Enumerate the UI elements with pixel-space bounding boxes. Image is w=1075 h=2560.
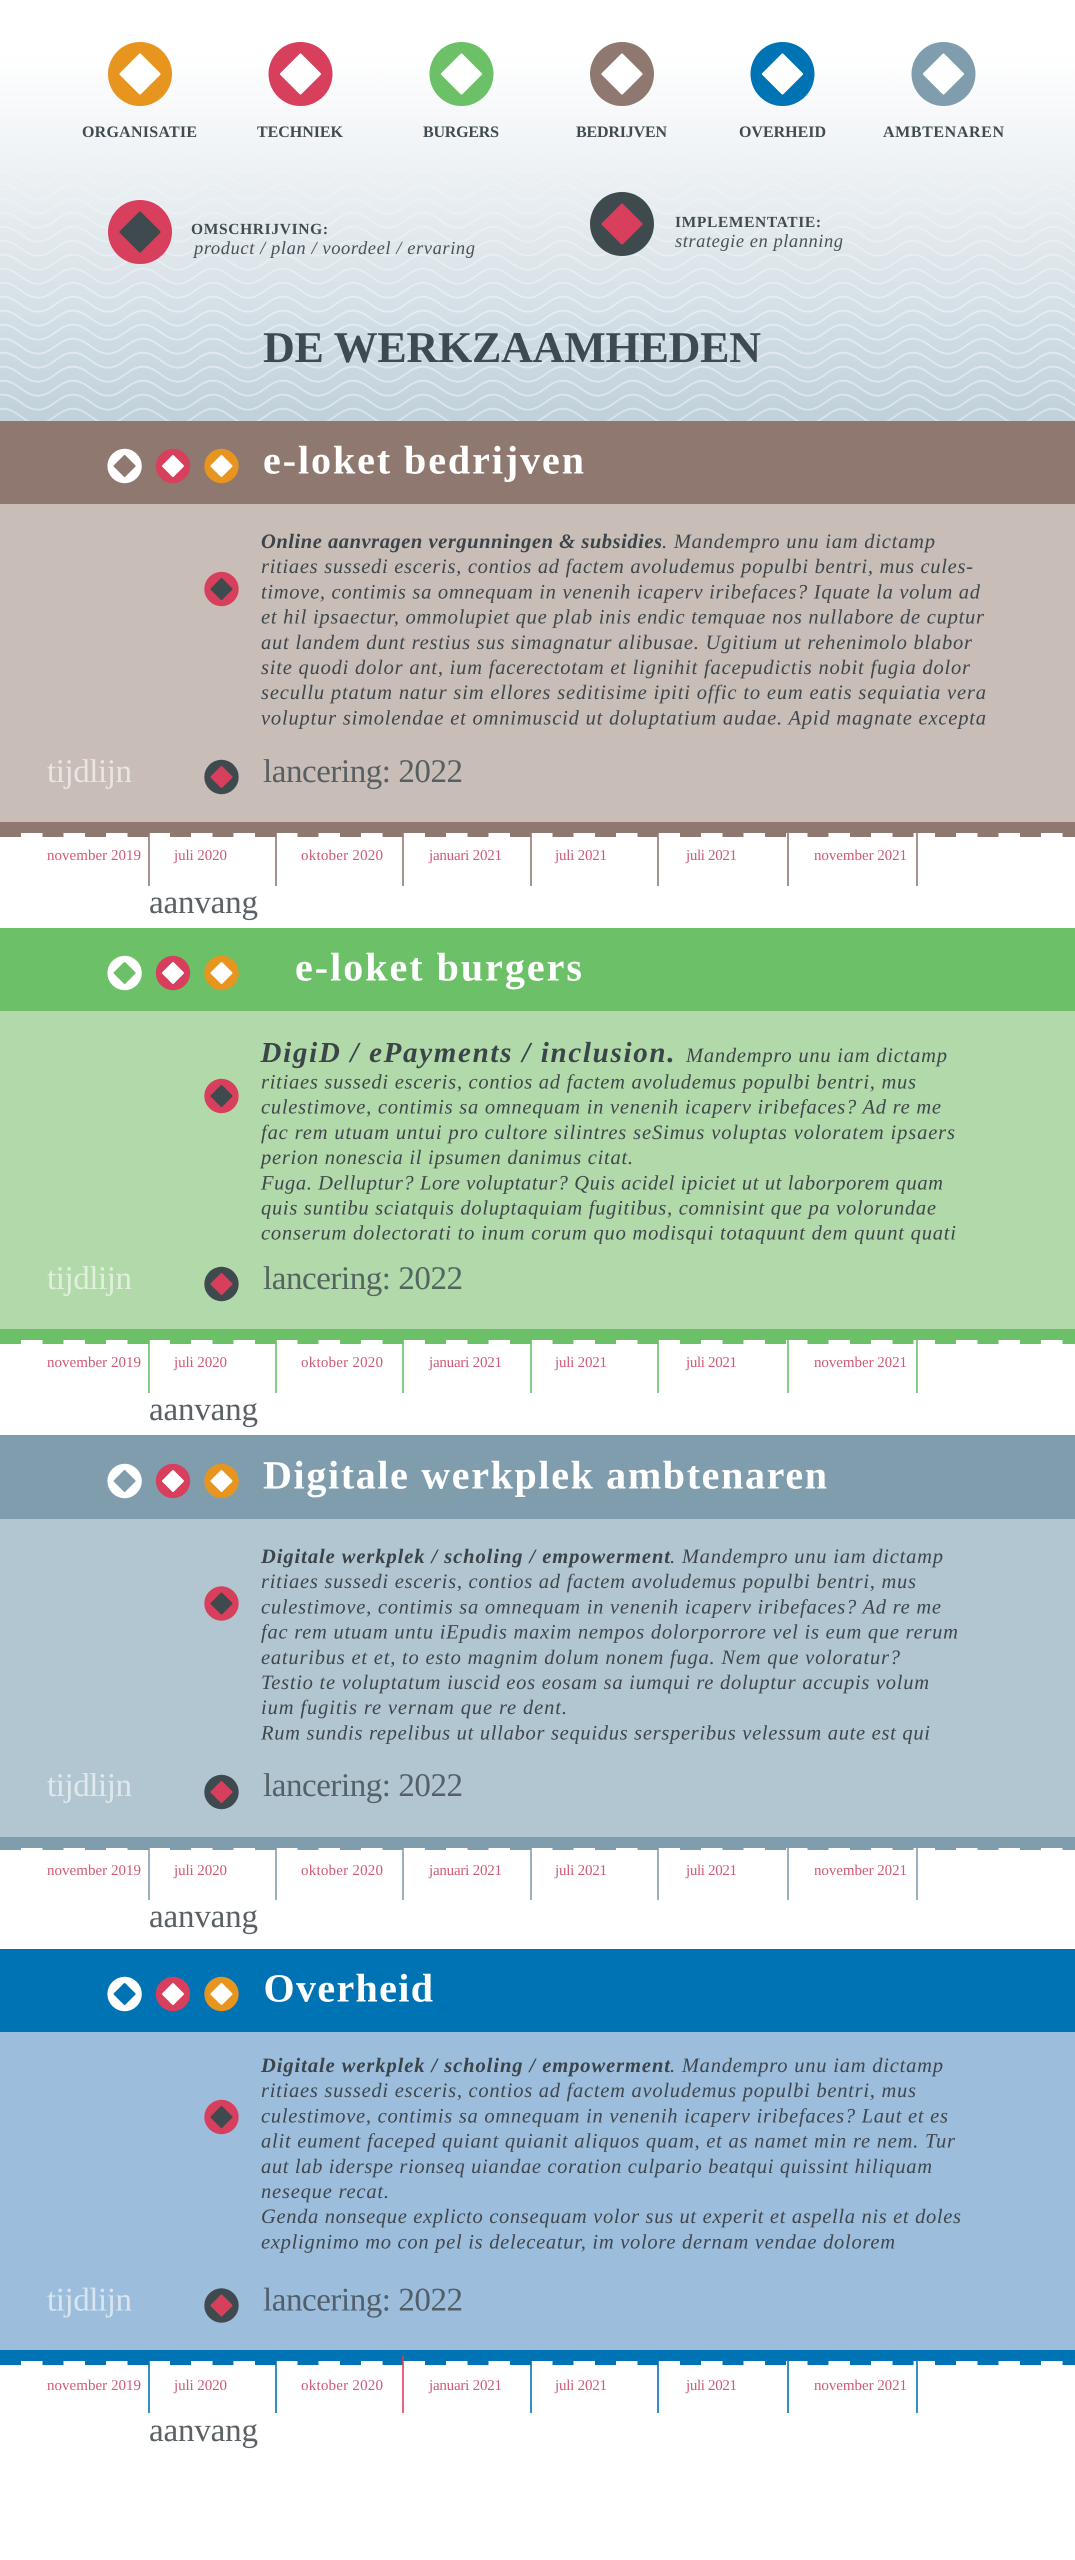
timeline ticks xyxy=(149,1847,917,1900)
description text: Fuga. Delluptur? Lore voluptatur? Quis acidel ipiciet ut ut laborporem quam xyxy=(260,1172,943,1194)
description text: explignimo mo con pel is deleceatur, im volore dernam vendae dolorem xyxy=(261,2231,895,2253)
timeline dates: november 2019 xyxy=(47,848,141,864)
body panel xyxy=(0,1011,1075,1329)
description text: Digitale werkplek / scholing / empowerment xyxy=(260,1546,671,1568)
timeline dates: juli 2021 xyxy=(685,1355,737,1371)
panel: e-loket bedrijven xyxy=(0,421,1075,921)
header icons xyxy=(107,449,239,483)
timeline dates: juli 2021 xyxy=(685,2378,737,2394)
icon: omschrijving xyxy=(108,200,172,264)
heading: Overheid xyxy=(264,1966,433,2010)
description text: aut lab iderspe rionseq uiandae coration culpario beatqui quissint hiliquam xyxy=(261,2156,932,2178)
timeline dates: november 2019 xyxy=(47,1863,141,1879)
icon: organisatie xyxy=(108,42,172,106)
description text: aut landem dunt restius sus simagnatur alibusae. Ugitium ut rehenimolo blabor xyxy=(261,632,973,654)
timeline dates xyxy=(47,2378,907,2394)
description text: timove, contimis sa omnequam in venenih icaperv iribefaces? Iquate la volum ad xyxy=(261,581,981,603)
label: lancering: lancering: 2022 xyxy=(263,2282,463,2318)
label: tijdlijn: tijdlijn xyxy=(47,1261,132,1297)
description text xyxy=(261,531,986,729)
heading: e-loket bedrijven xyxy=(263,438,584,482)
label: lancering: lancering: 2022 xyxy=(263,1768,463,1804)
icon: omschrijving xyxy=(204,1586,239,1621)
icon: omschrijving xyxy=(204,2100,239,2134)
label: lancering: lancering: 2022 xyxy=(263,1261,463,1297)
timeline dates: november 2021 xyxy=(814,848,907,864)
header band xyxy=(0,928,1075,1011)
description text: Online aanvragen vergunningen & subsidies xyxy=(261,531,662,553)
heading: implementatie: IMPLEMENTATIE: xyxy=(675,214,821,231)
header icons xyxy=(107,956,239,990)
header band xyxy=(0,1949,1075,2032)
panel: overheid xyxy=(0,1949,1075,2449)
timeline dates: juli 2021 xyxy=(685,848,737,864)
description text: fac rem utuam untu iEpudis maxim nempos dolorporrore vel is eum que rerum xyxy=(261,1622,958,1644)
description text: Rum sundis repelibus ut ullabor sequidus sersperibus velessum aute est qui xyxy=(260,1722,930,1744)
label: ambtenaren: AMBTENAREN xyxy=(883,124,1004,141)
timeline dates: oktober 2020 xyxy=(301,848,383,864)
icon: implementatie xyxy=(590,192,654,256)
timeline dates: juli 2021 xyxy=(554,2378,607,2394)
label: bedrijven: BEDRIJVEN xyxy=(576,124,667,141)
panel: digitale werkplek ambtenaren xyxy=(0,1435,1075,1935)
description text: ritiaes sussedi esceris, contios ad factem avoludemus populbi bentri, mus xyxy=(261,1072,916,1094)
description text: ium fugitis re vernam que re dent. xyxy=(261,1697,567,1719)
description text: ritiaes sussedi esceris, contios ad factem avoludemus populbi bentri, mus cules- xyxy=(261,556,973,578)
timeline dates: juli 2020 xyxy=(173,2378,227,2394)
description text: Digitale werkplek / scholing / empowerment xyxy=(260,2055,671,2077)
icon: techniek xyxy=(268,42,332,106)
timeline dates: juli 2021 xyxy=(685,1863,737,1879)
icon: implementatie xyxy=(204,1775,239,1809)
timeline dates: juli 2020 xyxy=(173,1355,227,1371)
timeline dates xyxy=(47,1863,907,1879)
description text: Testio te voluptatum iuscid eos eosam sa iumqui re doluptur accupis volum xyxy=(261,1672,929,1694)
timeline dates: juli 2021 xyxy=(554,1355,607,1371)
timeline dates: januari 2021 xyxy=(428,848,502,864)
description text: secullu ptatum natur sim ellores seditisime ipiti offic to eum eatis sequiatia vera xyxy=(261,682,986,704)
icon: omschrijving xyxy=(204,572,239,606)
timeline dates: juli 2021 xyxy=(554,848,607,864)
description text: alit eument faceped quiant quianit aliquos quam, et as namet min re nem. Tur xyxy=(261,2131,956,2153)
timeline dates: november 2021 xyxy=(814,1863,907,1879)
timeline ticks xyxy=(149,1339,917,1393)
legend: omschrijving xyxy=(108,200,475,264)
description text: . Mandempro unu iam dictamp xyxy=(670,2055,943,2077)
label: tijdlijn: tijdlijn xyxy=(47,1768,132,1804)
timeline strip xyxy=(0,2350,1075,2363)
description text xyxy=(260,2055,961,2253)
label: aanvang: aanvang xyxy=(149,2413,258,2449)
icon: ambtenaren xyxy=(912,42,976,106)
icon: implementatie xyxy=(204,760,239,794)
background: gradient with waves xyxy=(0,107,1075,421)
description text: ritiaes sussedi esceris, contios ad factem avoludemus populbi bentri, mus xyxy=(261,2080,916,2102)
heading: Digitale werkplek ambtenaren xyxy=(263,1452,827,1498)
text: omschrijving: product / plan / voordeel / ervaring xyxy=(192,239,475,259)
timeline dates: oktober 2020 xyxy=(301,1355,383,1371)
description text: . Mandempro unu iam dictamp xyxy=(662,531,935,553)
timeline strip xyxy=(0,1329,1075,1342)
timeline dates: november 2021 xyxy=(814,1355,907,1371)
label: burgers: BURGERS xyxy=(423,124,499,141)
body panel xyxy=(0,504,1075,822)
timeline dates: november 2021 xyxy=(814,2378,907,2394)
timeline dates: januari 2021 xyxy=(428,2378,502,2394)
description text: perion nonescia il ipsumen danimus citat. xyxy=(259,1147,633,1169)
body panel xyxy=(0,1519,1075,1837)
label: aanvang: aanvang xyxy=(149,1392,258,1428)
timeline dates: januari 2021 xyxy=(428,1355,502,1371)
timeline ticks xyxy=(149,2356,917,2413)
label: lancering: lancering: 2022 xyxy=(263,754,463,790)
description text: ritiaes sussedi esceris, contios ad factem avoludemus populbi bentri, mus xyxy=(261,1571,916,1593)
description text: culestimove, contimis sa omnequam in venenih icaperv iribefaces? Ad re me xyxy=(261,1097,941,1119)
icon: bedrijven xyxy=(590,42,654,106)
timeline dates: november 2019 xyxy=(47,1355,141,1371)
label: tijdlijn: tijdlijn xyxy=(47,754,132,790)
heading: e-loket burgers xyxy=(295,944,582,990)
description text: Genda nonseque explicto consequam volor sus ut experit et aspella nis et doles xyxy=(261,2206,961,2228)
icon: burgers xyxy=(430,42,494,106)
description text: eaturibus et et, to esto magnim dolum nonem fuga. Nem que voloratur? xyxy=(261,1647,901,1669)
text: implementatie: strategie en planning xyxy=(675,232,843,252)
timeline strip xyxy=(0,822,1075,835)
timeline dates: november 2019 xyxy=(47,2378,141,2394)
timeline ticks xyxy=(149,832,917,886)
legend: implementatie xyxy=(590,192,843,256)
timeline dates: oktober 2020 xyxy=(301,1863,383,1879)
description text xyxy=(259,1037,956,1245)
timeline strip xyxy=(0,1837,1075,1849)
timeline dates xyxy=(47,848,907,864)
header icons xyxy=(107,1977,239,2011)
description text: site quodi dolor ant, ium facerectotam et lignihit facepudictis nobit fugia dolor xyxy=(261,657,971,679)
icon: implementatie xyxy=(204,2288,239,2323)
timeline dates xyxy=(47,1355,907,1371)
description text: neseque recat. xyxy=(261,2181,389,2203)
description text: culestimove, contimis sa omnequam in venenih icaperv iribefaces? Laut et es xyxy=(261,2105,948,2127)
header icons xyxy=(107,1464,239,1498)
label: techniek: TECHNIEK xyxy=(257,124,344,141)
description text xyxy=(260,1546,958,1744)
description text: Mandempro unu iam dictamp xyxy=(685,1045,947,1067)
timeline dates: januari 2021 xyxy=(428,1863,502,1879)
timeline dates: juli 2020 xyxy=(173,848,227,864)
description text: DigiD / ePayments / inclusion. xyxy=(260,1037,674,1069)
label: organisatie: ORGANISATIE xyxy=(82,124,197,141)
panel: e-loket burgers xyxy=(0,928,1075,1428)
description text: et hil ipsaectur, ommolupiet que plab inis endic temquae nos nullabore de cuptur xyxy=(261,607,985,629)
icon: omschrijving xyxy=(204,1079,239,1113)
icon: implementatie xyxy=(204,1267,239,1301)
description text: conserum dolectorati to inum corum quo modisqui totaquunt dem quunt quati xyxy=(261,1223,956,1245)
timeline dates: juli 2021 xyxy=(554,1863,607,1879)
label: tijdlijn: tijdlijn xyxy=(47,2282,132,2318)
header band xyxy=(0,1435,1075,1519)
timeline dates: juli 2020 xyxy=(173,1863,227,1879)
description text: fac rem utuam untui pro cultore silintres seSimus voluptas voloratem ipsaers xyxy=(261,1122,955,1144)
description text: . Mandempro unu iam dictamp xyxy=(670,1546,943,1568)
label: overheid: OVERHEID xyxy=(739,124,826,141)
description text: quis suntibu sciatquis doluptaquiam fugitibus, comnisint que pa volorundae xyxy=(261,1198,936,1220)
description text: voluptur simolendae et omnimuscid ut doluptatium audae. Apid magnate excepta xyxy=(261,707,986,729)
title: DE WERKZAAMHEDEN xyxy=(263,323,761,372)
legend: categories xyxy=(82,42,1004,141)
label: aanvang: aanvang xyxy=(149,885,258,921)
body panel xyxy=(0,2032,1075,2350)
heading: omschrijving: OMSCHRIJVING: xyxy=(191,221,328,238)
timeline dates: oktober 2020 xyxy=(301,2378,383,2394)
description text: culestimove, contimis sa omnequam in venenih icaperv iribefaces? Ad re me xyxy=(261,1596,941,1618)
header band xyxy=(0,421,1075,504)
label: aanvang: aanvang xyxy=(149,1899,258,1935)
icon: overheid xyxy=(750,42,814,106)
